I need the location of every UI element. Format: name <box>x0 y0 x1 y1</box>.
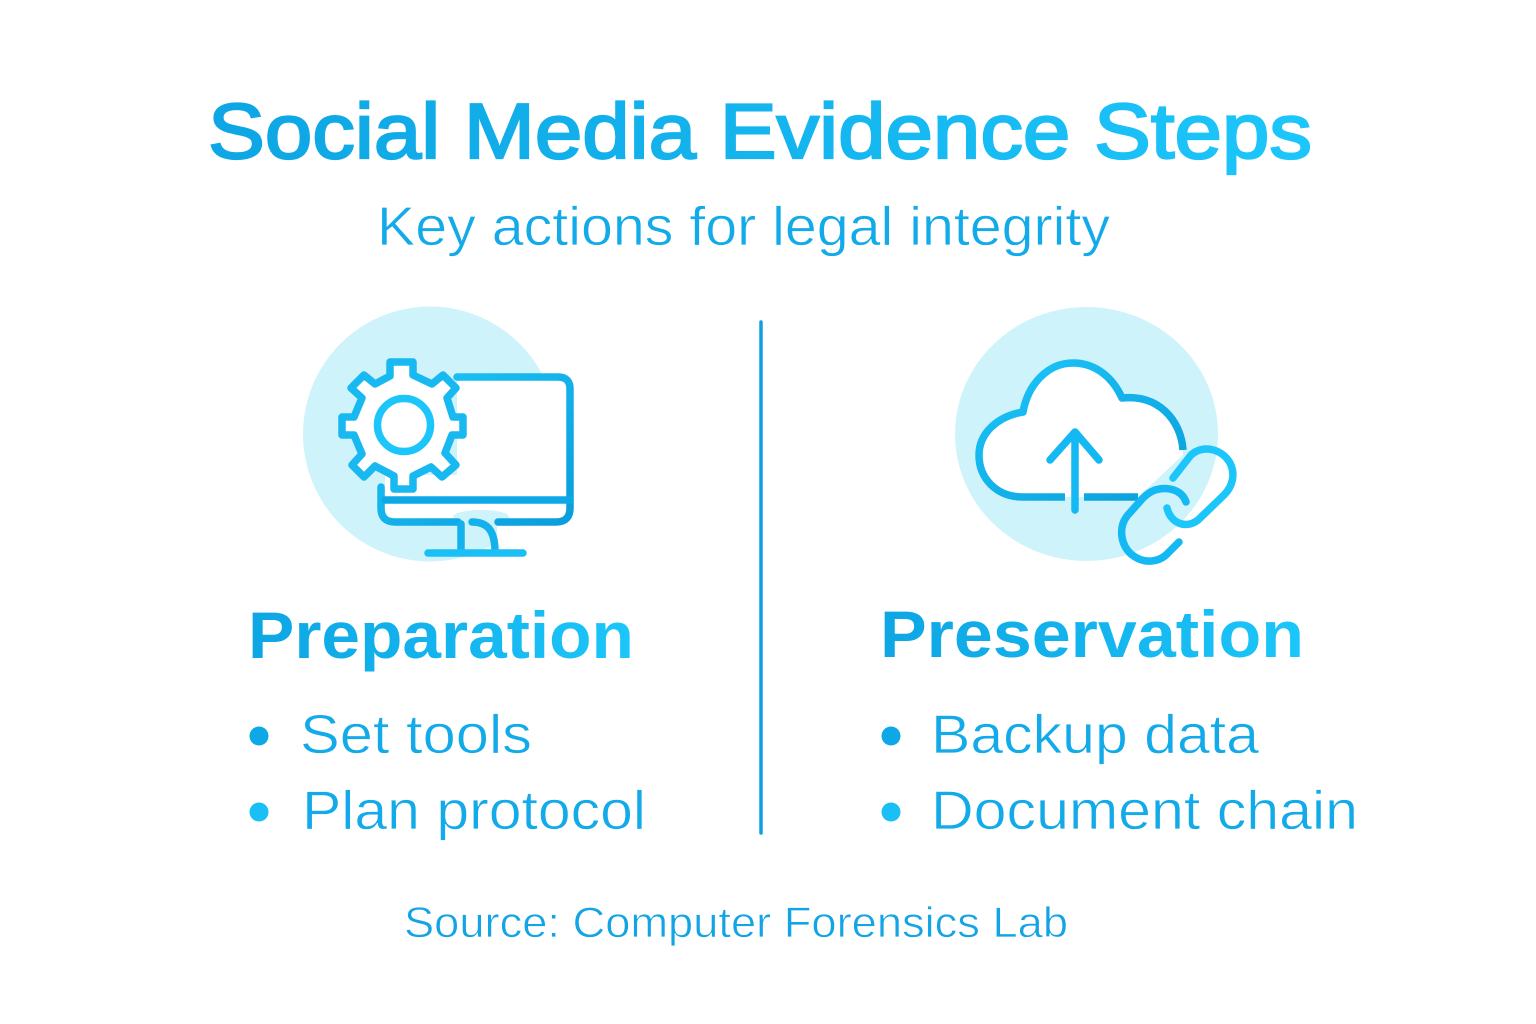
list item: Backup data: Backup data <box>931 703 1259 765</box>
list item: Document chain: Document chain <box>931 779 1358 841</box>
source note: Source: Computer Forensics Lab <box>404 899 1068 947</box>
title: Social Media Evidence Steps <box>208 87 1312 175</box>
icon: gear and monitor <box>303 306 570 562</box>
icon: cloud upload and chain link <box>955 307 1233 561</box>
heading: Preparation: Preparation <box>248 598 634 672</box>
list item: Set tools: Set tools <box>300 703 532 765</box>
panel: preparation <box>248 306 646 841</box>
subtitle: Key actions for legal integrity <box>377 195 1111 257</box>
heading: Preservation: Preservation <box>880 597 1304 671</box>
panel: preservation <box>880 307 1358 841</box>
list item: Plan protocol: Plan protocol <box>302 779 646 841</box>
divider <box>759 322 763 833</box>
